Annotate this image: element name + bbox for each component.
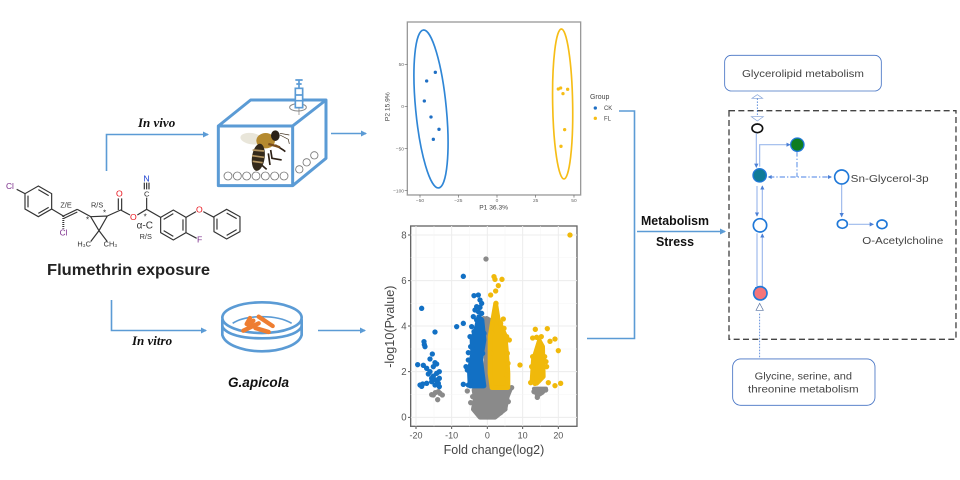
box: Glycerolipid metabolism: Glycerolipid metabolism bbox=[742, 69, 864, 80]
label: Metabolism Stress bbox=[641, 214, 709, 249]
chemical structure: flumethrin: Cl bbox=[6, 181, 14, 191]
arrow: cage to PCA bbox=[331, 132, 366, 134]
chemical structure: flumethrin bbox=[6, 174, 240, 249]
chemical structure: flumethrin: * bbox=[86, 216, 89, 225]
arrow: glycine link bbox=[758, 313, 761, 357]
chart: volcano plot: 6 bbox=[401, 276, 407, 287]
legend: Group bbox=[590, 94, 612, 122]
arrow: glycerolipid link bbox=[756, 98, 759, 117]
chemical structure: flumethrin: * bbox=[103, 209, 106, 218]
chemical structure: flumethrin: N bbox=[143, 174, 150, 184]
label: In vitro: In vitro bbox=[131, 333, 173, 348]
node: Sn-Glycerol-3p: Sn-Glycerol-3p bbox=[851, 174, 929, 185]
label: Metabolism Stress: Stress bbox=[656, 235, 694, 249]
chart: volcano plot: 4 bbox=[401, 321, 407, 332]
chemical structure: flumethrin: Cl bbox=[60, 227, 68, 237]
yellow group ellipse bbox=[551, 29, 574, 179]
box: Glycine, serine, and threonine metabolism bbox=[733, 359, 875, 405]
chemical structure: flumethrin: α-C bbox=[137, 220, 153, 231]
chart: PCA score plot: 25 bbox=[533, 198, 539, 204]
label: G.apicola: G.apicola bbox=[228, 375, 289, 390]
chart: volcano plot: 10 bbox=[518, 430, 528, 440]
node: pink bbox=[754, 287, 767, 300]
chart: PCA score plot: 50 bbox=[399, 62, 404, 68]
icon: petri dish with G. apicola bbox=[222, 302, 302, 351]
chemical structure: flumethrin: F bbox=[197, 235, 202, 245]
pathway arrows bbox=[756, 133, 873, 291]
label: In vivo: In vivo bbox=[137, 115, 176, 130]
chart: PCA score plot: −100 bbox=[393, 188, 404, 194]
chart: volcano plot: Fold change(log2) bbox=[444, 443, 544, 457]
node: teal bbox=[753, 169, 766, 182]
chart: volcano plot: -10 bbox=[445, 430, 458, 440]
box: Glycerolipid metabolism bbox=[725, 55, 881, 91]
chemical structure: flumethrin: R/S bbox=[91, 200, 103, 209]
title: Flumethrin exposure: Flumethrin exposure bbox=[47, 262, 210, 279]
chart: PCA score plot bbox=[384, 22, 612, 211]
chart: volcano plot: -log10(Pvalue) bbox=[383, 285, 397, 368]
yellow points bbox=[558, 88, 568, 146]
legend: Group: CK bbox=[604, 106, 612, 112]
grey non-significant points bbox=[432, 259, 546, 417]
chemical structure: flumethrin: C bbox=[144, 189, 150, 198]
label: Metabolism Stress: Metabolism bbox=[641, 214, 709, 228]
chemical structure: flumethrin: O bbox=[196, 204, 203, 214]
node: green bbox=[791, 138, 804, 151]
node: Sn-Glycerol-3p bbox=[835, 170, 929, 185]
chart: PCA score plot: −25 bbox=[454, 198, 463, 204]
chemical structure: flumethrin: O bbox=[130, 212, 137, 222]
chart: volcano plot: 8 bbox=[401, 230, 407, 241]
chemical structure: flumethrin: Z/E bbox=[60, 200, 72, 209]
blue group ellipse bbox=[408, 29, 454, 189]
chart: PCA score plot: 0 bbox=[496, 198, 499, 204]
legend: Group: FL bbox=[604, 116, 612, 122]
chemical structure: flumethrin: * bbox=[144, 212, 147, 221]
chart: PCA score plot: −50 bbox=[416, 198, 424, 204]
chart: PCA score plot: 50 bbox=[571, 198, 577, 204]
chemical structure: flumethrin: CH₃ bbox=[104, 240, 117, 249]
arrow: in vivo path bbox=[106, 134, 208, 171]
chart: PCA score plot: −50 bbox=[396, 146, 404, 152]
connector: plots merge bbox=[587, 111, 634, 338]
blue points bbox=[424, 72, 439, 139]
box: Glycine, serine, and threonine metabolism: Glycine, serine, and bbox=[755, 371, 852, 382]
node: open bbox=[753, 219, 767, 232]
chemical structure: flumethrin: H₃C bbox=[77, 240, 92, 249]
chart: volcano plot: 20 bbox=[553, 430, 563, 440]
chart: PCA score plot: P1 36.3% bbox=[479, 204, 508, 211]
diagram: metabolic pathway bbox=[725, 55, 956, 405]
chart: volcano plot: 0 bbox=[485, 430, 490, 440]
blue down-regulated points bbox=[418, 276, 484, 387]
chart: volcano plot: 0 bbox=[401, 413, 407, 424]
chart: volcano plot: 2 bbox=[401, 367, 407, 378]
node: black outlined bbox=[752, 124, 763, 133]
node: open small bbox=[837, 220, 847, 228]
node: O-Acetylcholine bbox=[862, 220, 944, 247]
chemical structure: flumethrin: R/S bbox=[140, 232, 152, 241]
icon: bee cage with syringe bbox=[218, 80, 326, 186]
legend: Group: Group bbox=[590, 94, 610, 101]
box: Glycine, serine, and threonine metabolism: threonine metabolism bbox=[748, 385, 859, 396]
chart: volcano plot: -20 bbox=[409, 430, 422, 440]
chart: PCA score plot: P2 15.9% bbox=[384, 92, 391, 121]
node: O-Acetylcholine: O-Acetylcholine bbox=[862, 236, 944, 247]
chemical structure: flumethrin: O bbox=[116, 189, 123, 199]
icon: syringe bbox=[295, 80, 303, 115]
arrow: to pathway bbox=[637, 230, 725, 232]
chart: PCA score plot: 0 bbox=[401, 104, 404, 110]
arrow: in vitro path bbox=[112, 300, 206, 330]
arrow: dish to volcano plot bbox=[318, 330, 365, 332]
yellow up-regulated points bbox=[490, 235, 570, 388]
icon: honey bee bbox=[240, 130, 289, 172]
chart: volcano plot bbox=[383, 226, 577, 457]
